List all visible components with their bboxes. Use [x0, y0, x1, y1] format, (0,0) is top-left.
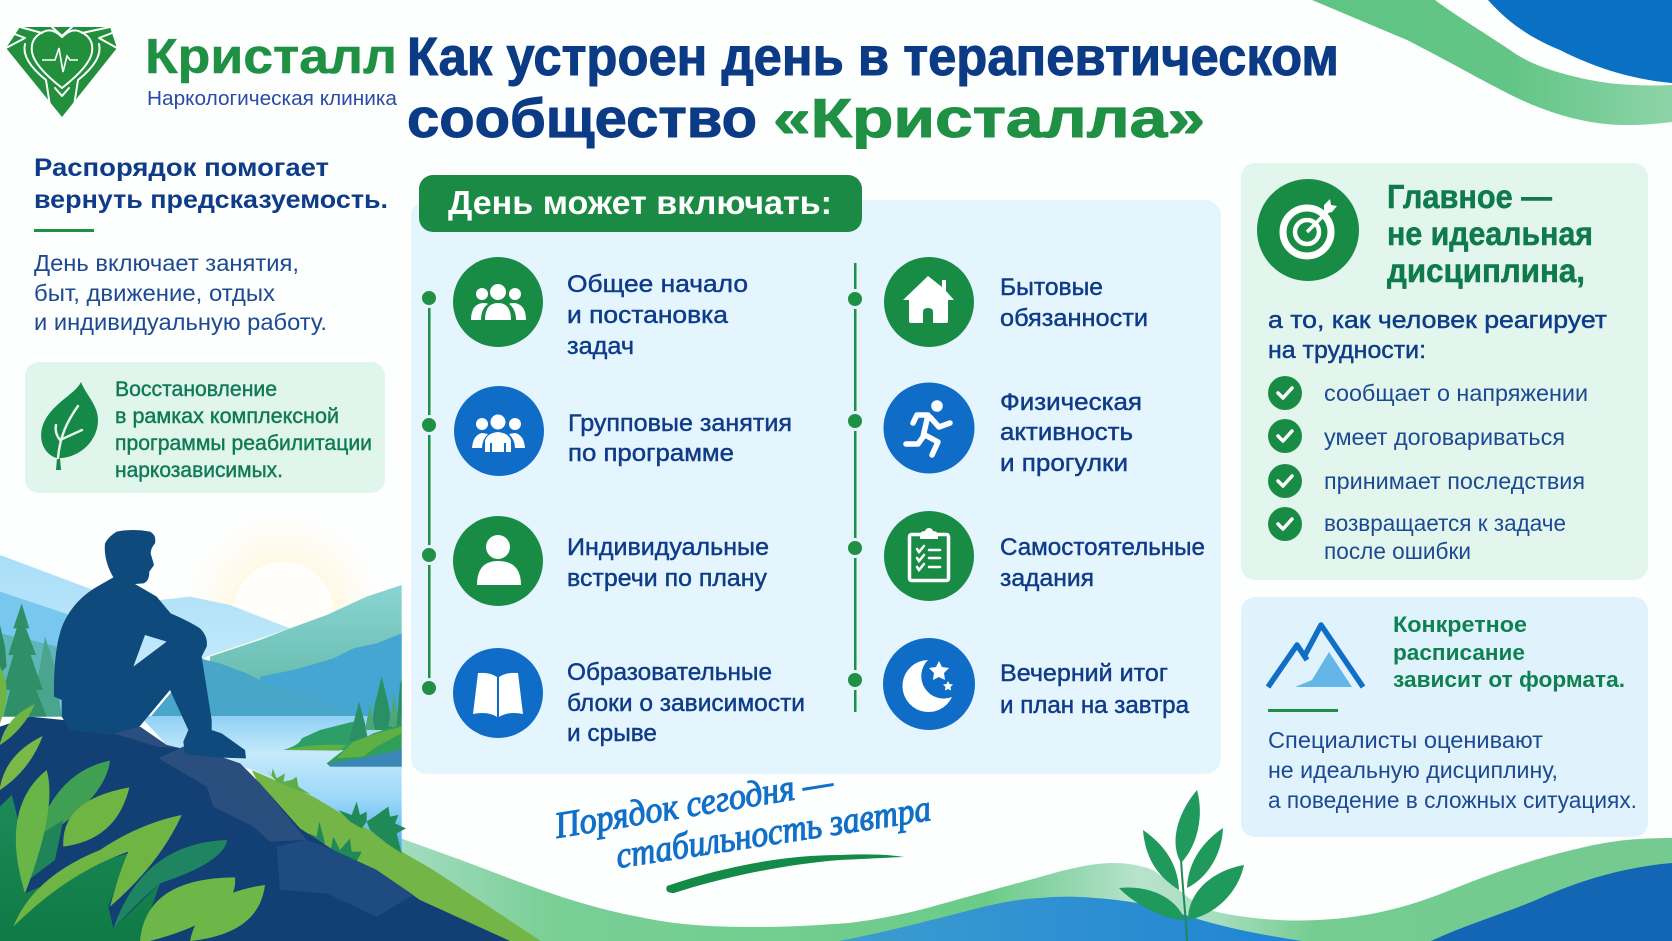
item: independent tasks: задания — [1000, 565, 1094, 592]
grass slope — [252, 770, 541, 941]
item: evening summary: и план на завтра — [1000, 692, 1190, 719]
item: household chores: Бытовые — [1000, 274, 1103, 301]
logo text: Кристалл — [145, 30, 397, 84]
left intro heading — [34, 154, 388, 232]
checklist: возвращается к задаче — [1324, 510, 1566, 536]
item: common start: Общее начало — [567, 271, 748, 298]
item: independent tasks: Самостоятельные — [1000, 534, 1205, 561]
main point heading: дисциплина, — [1387, 252, 1585, 289]
checklist: умеет договариваться — [1324, 424, 1565, 450]
item: individual meetings — [453, 516, 769, 606]
left intro text: быт, движение, отдых — [34, 280, 276, 306]
item: individual meetings: встречи по плану — [567, 565, 768, 592]
item: household chores: обязанности — [1000, 305, 1148, 332]
left timeline — [420, 290, 438, 696]
item: educational blocks: блоки о зависимости — [567, 690, 805, 717]
item: independent tasks — [884, 511, 1205, 601]
slogan: Порядок сегодня — — [551, 761, 837, 847]
main point heading: Главное — — [1387, 178, 1552, 215]
note text: наркозависимых. — [115, 459, 283, 482]
checklist: сообщает о напряжении — [1324, 380, 1588, 406]
slogan: стабильность завтра — [613, 788, 934, 877]
left intro heading: вернуть предсказуемость. — [34, 186, 388, 214]
item: physical activity: Физическая — [1000, 389, 1142, 416]
main point heading — [1387, 178, 1593, 289]
schedule text: а поведение в сложных ситуациях. — [1268, 787, 1637, 813]
panel: recovery note — [25, 362, 385, 493]
item: individual meetings: Индивидуальные — [567, 534, 769, 561]
icon: plant sprout — [1119, 790, 1244, 941]
header pill: День может включать: — [448, 184, 832, 221]
header pill — [419, 175, 862, 232]
left intro heading: Распорядок помогает — [34, 154, 329, 182]
schedule text — [1268, 727, 1637, 813]
left intro text: и индивидуальную работу. — [34, 309, 327, 335]
left fir trees — [0, 603, 62, 717]
note text: Восстановление — [115, 378, 277, 401]
item: evening summary — [883, 638, 1190, 730]
icon: mountain — [1268, 625, 1363, 687]
icon: leaf — [41, 382, 98, 470]
panel: main point — [1241, 163, 1648, 580]
title: Как устроен день в терапевтическом — [407, 27, 1339, 87]
icon: target — [1257, 179, 1359, 281]
item: physical activity: активность — [1000, 419, 1133, 446]
right shore and trees — [283, 677, 402, 767]
item: group sessions — [454, 386, 792, 476]
item: educational blocks: и срыве — [567, 720, 657, 747]
schedule heading: зависит от формата. — [1393, 667, 1625, 692]
item: group sessions: Групповые занятия — [568, 410, 792, 437]
checklist — [1268, 376, 1588, 564]
schedule text: Специалисты оценивают — [1268, 727, 1543, 753]
foreground leaves — [0, 667, 265, 941]
mountains — [0, 555, 402, 717]
item: physical activity — [884, 382, 1142, 477]
item: evening summary: Вечерний итог — [1000, 660, 1168, 687]
item: common start: и постановка — [567, 302, 728, 329]
panel: schedule note — [1241, 597, 1648, 837]
schedule text: не идеальную дисциплину, — [1268, 757, 1558, 783]
panel: day activities — [411, 175, 1221, 774]
logo: crystal heart emblem — [6, 27, 117, 117]
logo text: Наркологическая клиника — [147, 88, 398, 110]
title — [407, 27, 1339, 149]
item: common start — [453, 257, 748, 360]
logo text — [145, 30, 398, 110]
schedule heading: расписание — [1393, 640, 1525, 665]
schedule heading — [1393, 612, 1625, 692]
left intro text: День включает занятия, — [34, 250, 299, 276]
checklist: после ошибки — [1324, 538, 1471, 564]
main point subheading: а то, как человек реагирует — [1268, 307, 1607, 334]
note text — [115, 378, 372, 482]
bottom wave — [400, 838, 1672, 941]
rock — [0, 717, 510, 941]
item: group sessions: по программе — [568, 440, 734, 467]
item: household chores — [884, 257, 1148, 347]
main point subheading: на трудности: — [1268, 337, 1426, 364]
title: сообщество — [407, 87, 757, 149]
main point heading: не идеальная — [1387, 215, 1593, 252]
schedule heading: Конкретное — [1393, 612, 1527, 637]
note text: в рамках комплексной — [115, 405, 339, 428]
title: «Кристалла» — [773, 87, 1205, 149]
note text: программы реабилитации — [115, 432, 372, 455]
man silhouette — [54, 530, 246, 758]
slogan — [551, 761, 934, 893]
checklist: принимает последствия — [1324, 468, 1585, 494]
top right wave — [1312, 0, 1672, 125]
item: common start: задач — [567, 333, 634, 360]
item: physical activity: и прогулки — [1000, 450, 1128, 477]
item: educational blocks: Образовательные — [567, 659, 772, 686]
left intro text — [34, 250, 327, 335]
right timeline — [846, 263, 864, 712]
lake — [140, 716, 402, 853]
item: educational blocks — [453, 648, 805, 747]
illustration: man on rock overlooking lake — [0, 513, 541, 941]
grass tufts — [267, 768, 406, 872]
brush underline — [666, 854, 904, 893]
main point subheading — [1268, 307, 1607, 364]
sun — [187, 513, 380, 707]
